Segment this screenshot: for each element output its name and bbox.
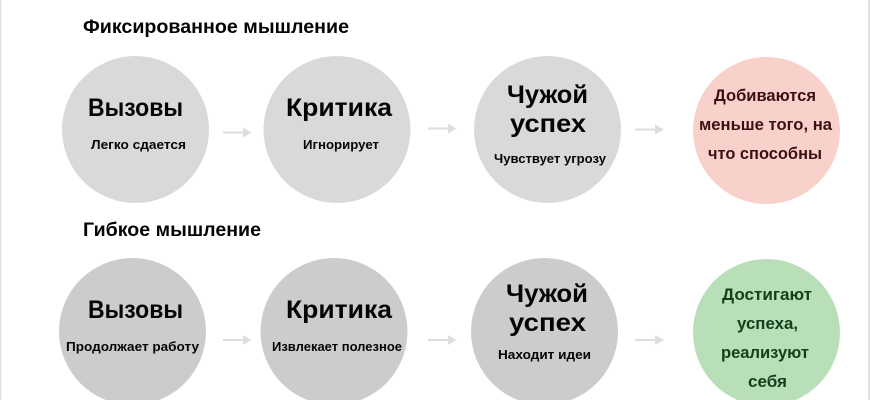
panel: fixed challenges: Вызовы [88,94,183,122]
panel: growth outcome: успеха, [737,314,798,333]
panel: fixed outcome: меньше того, на [699,115,833,134]
panel: fixed criticism [264,56,410,203]
panel: fixed outcome: что способны [708,144,822,163]
panel: fixed others' success [474,56,621,203]
arrow: growth 1 [223,335,252,345]
panel: growth challenges: Продолжает работу [66,339,200,354]
arrow: fixed 3 [635,124,664,134]
panel: fixed others' success: Чужой [507,81,588,109]
panel: fixed criticism: Критика [286,94,393,122]
panel: growth others' success [471,258,618,400]
panel: growth others' success: Чужой [506,280,588,308]
panel: growth outcome: Достигают [722,285,812,304]
panel: growth challenges [59,258,206,400]
panel: fixed outcome [693,57,840,204]
panel: fixed outcome: Добиваются [714,86,816,105]
panel: growth others' success: успех [509,309,586,337]
panel: growth outcome: себя [748,372,787,391]
panel: growth criticism: Критика [286,296,393,324]
panel: growth challenges: Вызовы [88,296,183,324]
panel: growth outcome: реализуют [721,343,809,362]
panel: growth outcome [693,259,840,400]
panel: growth criticism: Извлекает полезное [272,339,402,354]
heading: fixed mindset: Фиксированное мышление [83,17,349,38]
panel: fixed others' success: успех [510,110,586,138]
panel: fixed challenges [62,56,209,203]
arrow: growth 3 [635,335,664,345]
panel: fixed criticism: Игнорирует [303,137,379,152]
panel: fixed challenges: Легко сдается [91,137,186,152]
arrow: growth 2 [428,335,456,345]
panel: fixed others' success: Чувствует угрозу [494,151,607,166]
panel: growth criticism [260,258,408,400]
arrow: fixed 2 [428,124,456,134]
panel: growth others' success: Находит идеи [498,347,591,362]
heading: growth mindset: Гибкое мышление [83,220,261,241]
arrow: fixed 1 [223,128,252,138]
